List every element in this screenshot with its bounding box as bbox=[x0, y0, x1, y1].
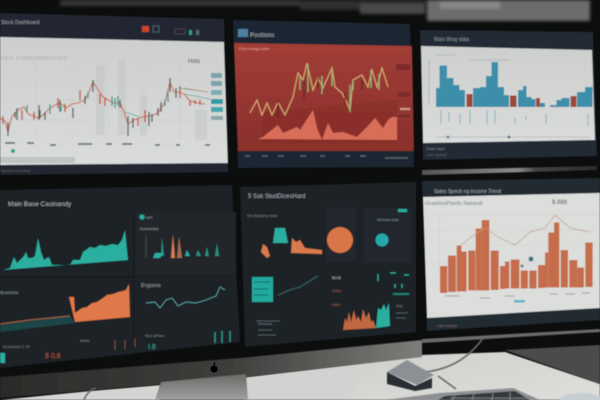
orange circle bbox=[327, 227, 353, 253]
chart heading: NEX CONSUMMOTICD bbox=[1, 56, 68, 62]
panel heading: Main Base Casinandy bbox=[8, 201, 72, 208]
lower metrics: Non aFlow bbox=[145, 333, 164, 338]
line overlay bbox=[461, 215, 590, 245]
line: faint orange bbox=[0, 316, 70, 324]
panel: mixed KPI dashboard: Sales bbox=[332, 289, 341, 293]
area: volume bbox=[258, 110, 397, 140]
panel heading: Sales Spectr ng income Trend bbox=[434, 189, 501, 195]
slider dots bbox=[436, 136, 590, 138]
side labels bbox=[396, 64, 410, 117]
sparkline marks bbox=[441, 110, 588, 126]
right background wall bbox=[505, 345, 600, 384]
teal button bbox=[393, 293, 409, 295]
panel: teal bar chart screen bbox=[420, 30, 597, 175]
teal table lines bbox=[254, 282, 270, 295]
panel: red chart screen bbox=[233, 20, 414, 168]
bar chart: orange bbox=[440, 220, 593, 293]
teal pill bbox=[514, 300, 525, 302]
phone device on desk bbox=[387, 360, 434, 391]
lower metrics: $ 0,8 bbox=[45, 353, 61, 360]
keyboard bbox=[385, 388, 600, 400]
teal block bbox=[273, 228, 288, 243]
marker dots bbox=[529, 257, 533, 261]
panel: candlestick chart on light screen: Hsts bbox=[188, 59, 200, 65]
teal indicators bbox=[378, 273, 409, 288]
panel heading: Positions bbox=[250, 33, 274, 39]
bar chart: red accents bbox=[466, 94, 576, 107]
area chart: teal bbox=[3, 230, 128, 270]
icon: thumbnail bbox=[238, 29, 248, 37]
footer text: Total value bbox=[426, 146, 446, 151]
small metric: Day bbox=[396, 304, 403, 308]
KPI value: $ 888 bbox=[552, 200, 568, 206]
panel heading: 5 Sak StudDicesHard bbox=[248, 194, 305, 200]
teal tag bbox=[398, 209, 407, 212]
header icons bbox=[142, 26, 199, 35]
cable bbox=[84, 338, 483, 400]
monitor chin bbox=[0, 340, 422, 398]
sidebar buttons bbox=[211, 73, 223, 120]
dark band behind volume bbox=[262, 100, 397, 143]
panel heading: Main Wray data bbox=[434, 37, 469, 43]
monitor strip bbox=[422, 166, 597, 175]
mouse bbox=[559, 393, 600, 400]
lower metrics: Netto bbox=[80, 338, 90, 343]
spike chart bbox=[146, 234, 219, 258]
legend text: Network stats bbox=[377, 218, 399, 222]
lower metrics bbox=[0, 331, 230, 363]
panel: mixed KPI dashboard: Ratio bbox=[332, 303, 340, 307]
panel heading: Stock Dashboard bbox=[1, 20, 40, 26]
line: price bbox=[250, 63, 388, 115]
lower metrics: Economic 1.79 bbox=[3, 344, 30, 349]
chart heading: GraddonPlanfo Natandi bbox=[425, 201, 482, 207]
line chart: Enganns bbox=[141, 283, 161, 289]
small line chart bbox=[278, 276, 318, 295]
icon: teal badge bbox=[139, 214, 145, 220]
footer text: Market overview bbox=[1, 168, 30, 173]
data labels: $128 bbox=[332, 275, 342, 280]
orange bars bbox=[261, 244, 270, 258]
sub chart caption: Economics bbox=[140, 227, 159, 231]
panel: candlestick chart on light screen bbox=[0, 13, 228, 175]
lower volume marks bbox=[5, 143, 210, 145]
panel: orange bar chart screen bbox=[422, 178, 600, 331]
teal circle bbox=[376, 234, 388, 246]
desk surface bbox=[0, 352, 600, 400]
panel: teal bar chart screen: Last update bbox=[426, 152, 448, 157]
area chart: orange bbox=[69, 284, 130, 322]
grid bands bbox=[96, 60, 207, 140]
legend text: Price change index bbox=[239, 47, 270, 51]
panel: dark dashboard with area charts bbox=[0, 185, 240, 368]
footer text: Last volume bbox=[437, 324, 457, 328]
candles bbox=[300, 65, 379, 112]
right monitor lower rim bbox=[422, 329, 600, 343]
list rows bbox=[256, 321, 280, 335]
panel: mixed KPI dashboard: Sm Industry tone bbox=[247, 213, 278, 218]
panel: mixed KPI dashboard bbox=[240, 182, 416, 347]
panel: dark dashboard with area charts: Bussines bbox=[0, 290, 19, 295]
area chart: dark base bbox=[0, 316, 75, 332]
footer ticks bbox=[245, 156, 408, 158]
bar chart: teal bbox=[436, 62, 592, 107]
teal table bbox=[252, 277, 273, 302]
orange bars right bbox=[291, 238, 322, 254]
line: price bbox=[0, 82, 205, 132]
panel: dark dashboard with area charts: Sun Euraoandry bbox=[1, 221, 34, 226]
monitor stand bbox=[155, 374, 248, 400]
axis labels bbox=[445, 293, 590, 298]
forecast lines bbox=[125, 88, 210, 117]
candlesticks bbox=[3, 78, 200, 136]
bar chart: mixed bbox=[343, 303, 390, 330]
lower metrics: I.8 bbox=[148, 344, 156, 351]
sub chart label: KPI bbox=[146, 215, 152, 220]
icon: logo on chin bbox=[210, 363, 218, 373]
list: Revenue bbox=[258, 322, 272, 326]
